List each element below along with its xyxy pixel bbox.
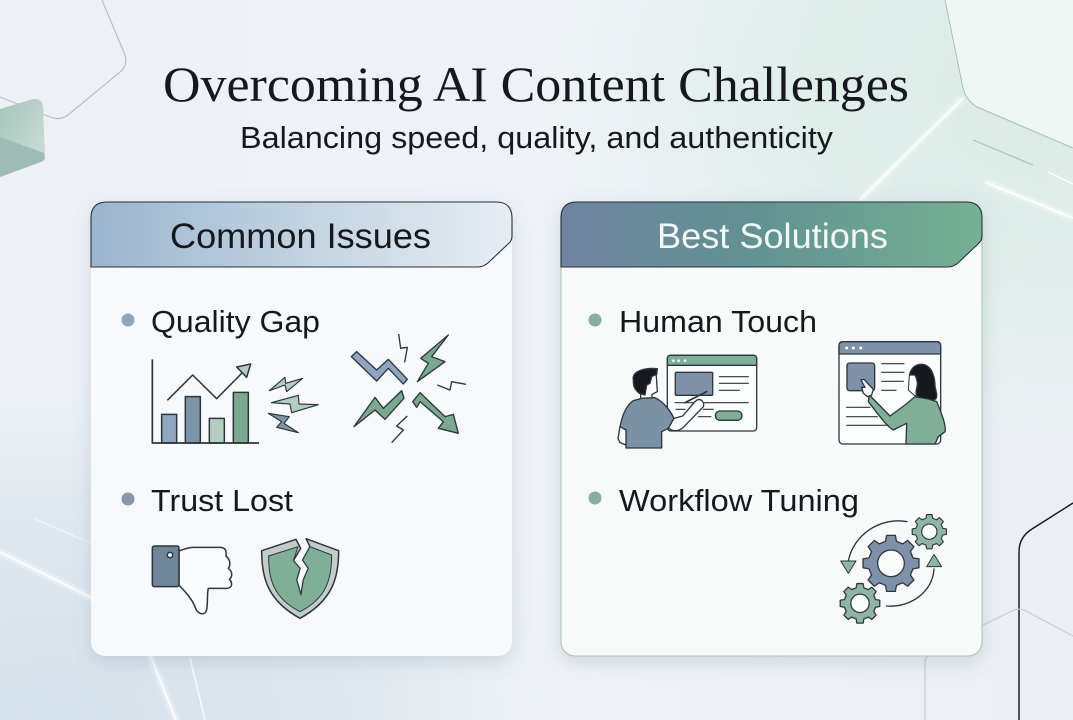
bullet: human touch bbox=[588, 314, 602, 326]
icon: small lightning bolts bbox=[268, 377, 318, 433]
person face bbox=[908, 373, 919, 396]
heading: Best Solutions bbox=[657, 217, 888, 256]
title: Overcoming AI Content Challenges bbox=[163, 56, 909, 112]
panel header bbox=[561, 202, 982, 267]
label: workflow tuning: Workflow Tuning bbox=[619, 483, 859, 518]
subtitle: Balancing speed, quality, and authenticity bbox=[240, 120, 834, 155]
person torso bbox=[620, 398, 674, 448]
bullet: quality gap bbox=[122, 314, 134, 326]
label: trust lost: Trust Lost bbox=[151, 483, 293, 518]
person left hand bbox=[618, 427, 627, 445]
person hand bbox=[861, 379, 873, 397]
icon: person pointing at window bbox=[839, 342, 945, 444]
panel: common issues bbox=[91, 202, 512, 656]
panel body bbox=[91, 202, 512, 656]
label: quality gap: Quality Gap bbox=[151, 304, 320, 339]
person face bbox=[641, 372, 657, 401]
label: human touch: Human Touch bbox=[619, 304, 817, 339]
person hair bbox=[633, 368, 657, 395]
heading: Common Issues bbox=[170, 217, 431, 256]
icon: thumbs down bbox=[152, 546, 232, 614]
panel body bbox=[561, 202, 982, 656]
person forearm bbox=[668, 400, 704, 431]
bullet: workflow tuning bbox=[588, 492, 602, 504]
icon: broken shield bbox=[262, 539, 339, 618]
bullet: trust lost bbox=[122, 492, 134, 506]
icon: bar chart with rising arrow bbox=[152, 359, 259, 443]
panel: best solutions bbox=[561, 202, 982, 656]
panel header bbox=[91, 202, 512, 267]
icon: person editing window bbox=[618, 355, 757, 448]
person hair bbox=[909, 364, 937, 400]
person body bbox=[868, 395, 945, 444]
icon: gears cycle bbox=[840, 515, 946, 623]
icon: broken arrows bbox=[351, 334, 466, 443]
